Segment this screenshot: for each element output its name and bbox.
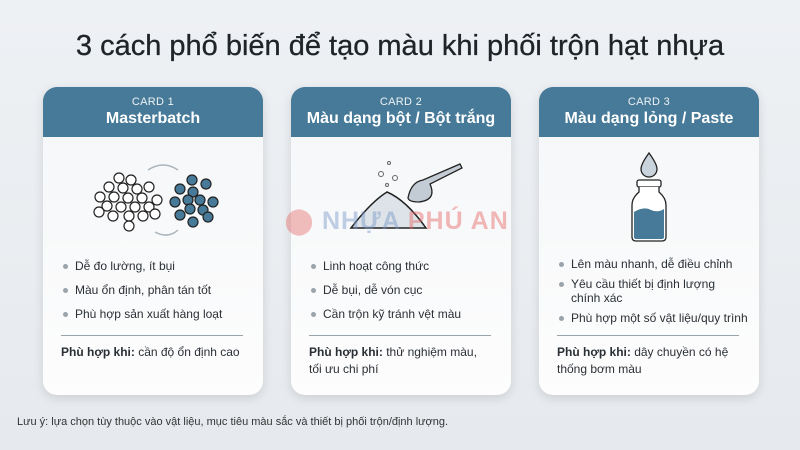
bullets: Cần trộn kỹ tránh vệt màu <box>323 307 461 321</box>
bullets: Yêu cầu thiết bị định lượng <box>571 277 715 291</box>
fit text <box>557 345 728 376</box>
fit text <box>309 345 477 376</box>
fit text: Phù hợp khi: dây chuyền có hệ <box>557 345 728 359</box>
bullets: Phù hợp sản xuất hàng loạt <box>75 307 222 321</box>
fit text: Phù hợp khi: thử nghiệm màu, <box>309 345 477 359</box>
header: card 1 <box>43 87 263 137</box>
header: card 3: CARD 3 <box>628 96 670 108</box>
panel: card 3 <box>539 87 759 395</box>
header: card 1: Masterbatch <box>106 110 200 127</box>
icon: powder and scoop <box>350 161 463 229</box>
panel: card 2 <box>291 87 511 395</box>
bullets: Dễ đo lường, ít bụi <box>75 259 175 273</box>
panel: card 1 <box>43 87 263 395</box>
footnote: Lưu ý: lựa chọn tùy thuộc vào vật liệu, mục tiêu màu sắc và thiết bị phối trộn/định lượng. <box>17 416 448 428</box>
bullets: chính xác <box>571 291 622 305</box>
header: card 2: Màu dạng bột / Bột trắng <box>307 110 495 127</box>
title: 3 cách phổ biến để tạo màu khi phối trộn hạt nhựa <box>76 30 724 62</box>
fit text: thống bơm màu <box>557 362 642 376</box>
bullets <box>63 259 222 321</box>
icon: pellets <box>93 164 219 236</box>
header: card 2: CARD 2 <box>380 96 422 108</box>
bullets: Lên màu nhanh, dễ điều chỉnh <box>571 257 732 271</box>
bullets: Phù hợp một số vật liệu/quy trình <box>571 311 748 325</box>
watermark logo: ⬤ NHỰA PHÚ AN <box>285 207 509 235</box>
bullets <box>311 259 461 321</box>
fit text: Phù hợp khi: cần độ ổn định cao <box>61 345 240 359</box>
bullets: Màu ổn định, phân tán tốt <box>75 283 211 297</box>
icon: drop and bottle <box>631 152 667 242</box>
header: card 3 <box>539 87 759 137</box>
bullets: Linh hoạt công thức <box>323 259 429 273</box>
bullets: Dễ bụi, dễ vón cục <box>323 283 422 297</box>
header: card 2 <box>291 87 511 137</box>
header: card 3: Màu dạng lỏng / Paste <box>565 110 733 127</box>
bullets <box>559 257 748 325</box>
fit text: tối ưu chi phí <box>309 362 378 376</box>
header: card 1: CARD 1 <box>132 96 174 108</box>
